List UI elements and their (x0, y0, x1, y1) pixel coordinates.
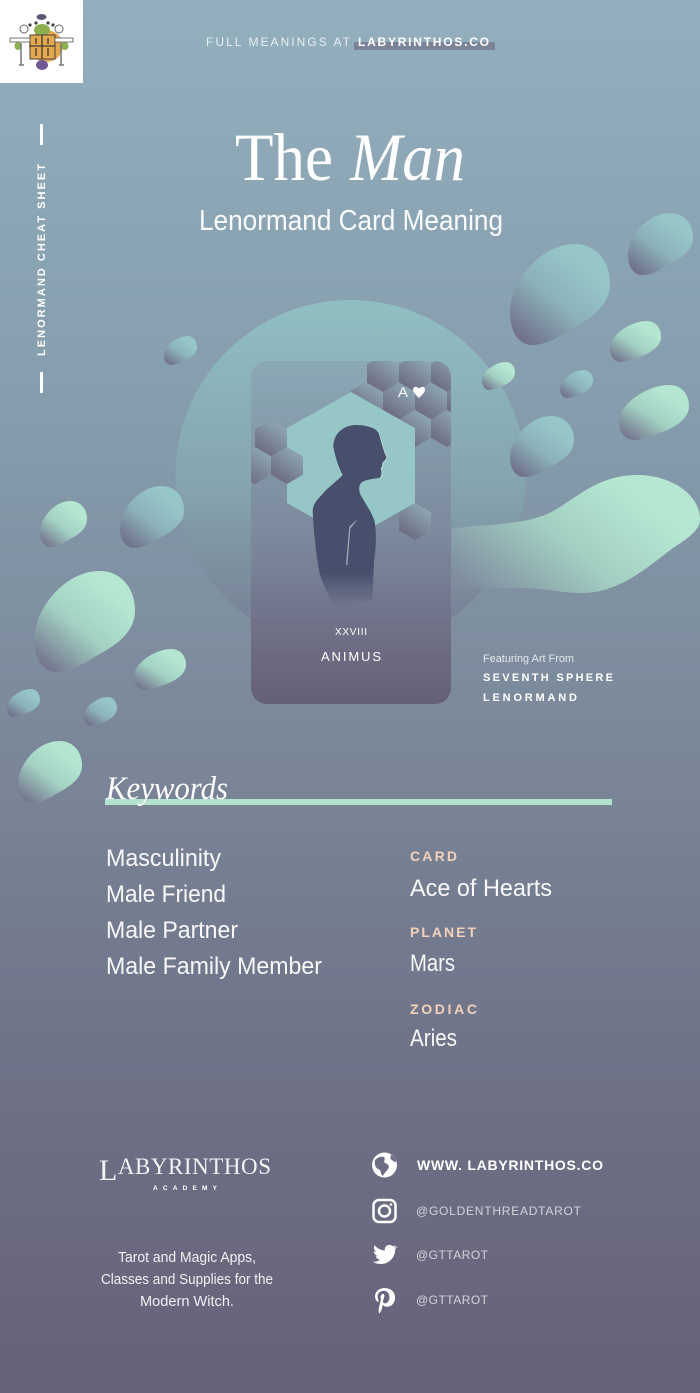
card number: XXVIII (335, 627, 367, 638)
instagram row (374, 1200, 582, 1222)
hexagon cluster (251, 361, 451, 484)
twitter row: @GTTAROT (416, 1248, 489, 1262)
subtitle: Lenormand Card Meaning (199, 205, 503, 237)
website row: WWW. LABYRINTHOS.CO (417, 1157, 603, 1173)
tagline (101, 1250, 273, 1310)
planet attribute: PLANET (410, 924, 476, 940)
card suit label: A (398, 384, 409, 400)
tagline: Tarot and Magic Apps, (118, 1250, 256, 1266)
art credit (483, 653, 613, 704)
keywords list: Masculinity (106, 845, 221, 872)
zodiac attribute: ZODIAC (410, 1001, 477, 1017)
large flowing wave blob (440, 475, 700, 593)
icon: globe (372, 1152, 397, 1178)
icon: heart (413, 387, 425, 398)
title: The (235, 119, 333, 195)
keywords heading (105, 771, 612, 807)
large hexagon (287, 392, 415, 539)
planet attribute: Mars (410, 950, 455, 977)
logo tile (0, 0, 83, 83)
card name: ANIMUS (321, 649, 381, 664)
art credit: SEVENTH SPHERE (483, 672, 613, 684)
title: Man (349, 119, 465, 195)
tagline: Modern Witch. (140, 1294, 234, 1310)
pinterest row: @GTTAROT (416, 1293, 489, 1307)
floating blobs (7, 213, 693, 803)
icon: instagram (374, 1200, 396, 1222)
keywords list: Male Family Member (106, 953, 322, 980)
keywords list: Male Friend (106, 881, 226, 908)
tagline: Classes and Supplies for the (101, 1272, 273, 1288)
footer logo: L (99, 1154, 117, 1187)
background circle (176, 300, 526, 650)
footer logo: ACADEMY (153, 1185, 218, 1192)
card suit label (398, 384, 425, 400)
art credit: Featuring Art From (483, 653, 574, 665)
sidebar label: LENORMAND CHEAT SHEET (36, 164, 48, 356)
footer logo (99, 1154, 271, 1192)
icon: twitter (373, 1245, 398, 1264)
icon: pinterest (375, 1288, 395, 1314)
title (235, 119, 465, 195)
zodiac attribute: Aries (410, 1025, 457, 1052)
top link: LABYRINTHOS.CO (358, 35, 489, 49)
keywords list: Male Partner (106, 917, 238, 944)
face highlight (378, 431, 387, 478)
keywords list (106, 845, 322, 980)
instagram row: @GOLDENTHREADTAROT (416, 1204, 582, 1218)
card attribute: Ace of Hearts (410, 875, 552, 902)
art credit: LENORMAND (483, 692, 577, 704)
small hexagons over large hexagon (271, 447, 431, 540)
zodiac attribute (410, 1001, 477, 1052)
website row (372, 1152, 603, 1178)
twitter row (373, 1245, 489, 1264)
planet attribute (410, 924, 476, 977)
icon: man silhouette (313, 425, 387, 610)
pinterest row (375, 1288, 489, 1314)
keywords heading: Keywords (105, 771, 228, 807)
top link (206, 35, 495, 50)
footer logo: ABYRINTHOS (118, 1154, 271, 1179)
top link: FULL MEANINGS AT (206, 35, 351, 49)
card attribute (410, 848, 552, 902)
card attribute: CARD (410, 848, 457, 864)
card (251, 361, 451, 704)
arm highlight (346, 518, 358, 565)
